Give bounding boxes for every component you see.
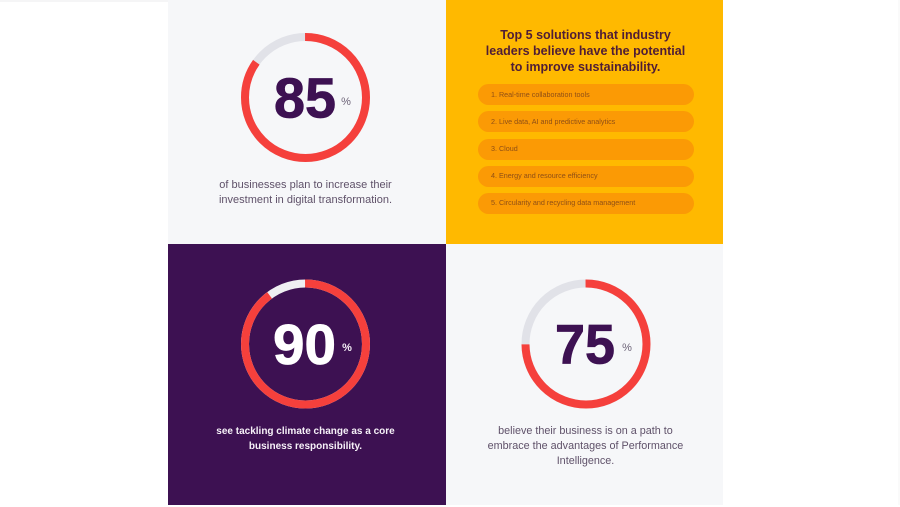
list item 5 [478,192,694,214]
donut chart: 90 percent [241,280,370,408]
caption: 75 percent: believe their business is on a path to [498,425,673,437]
donut chart: 75 percent: % [622,342,632,354]
donut chart: 85 percent [241,33,370,162]
donut chart: 75 percent [522,280,650,408]
heading: top 5 solutions: leaders believe have the potential [486,44,685,58]
heading: top 5 solutions [486,28,685,74]
list item 3: 3. Cloud [491,144,518,153]
list item 5: 5. Circularity and recycling data management [491,198,635,207]
caption: 75 percent [488,425,683,467]
list item 2 [478,111,694,132]
donut chart: 90 percent: % [342,342,352,354]
top edge shadow strip [0,0,168,2]
caption: 90 percent: see tackling climate change as a core [216,426,395,437]
panel: 90 percent climate responsibility [168,244,446,505]
list item 3 [478,138,694,160]
donut chart: 85 percent: 85 [274,66,336,130]
list item 2: 2. Live data, AI and predictive analytics [491,116,615,126]
caption: 75 percent: embrace the advantages of Performance [488,440,683,452]
heading: top 5 solutions: to improve sustainability. [511,60,660,74]
list item 1 [478,84,694,105]
caption: 85 percent: investment in digital transformation. [219,194,392,206]
list item 4: 4. Energy and resource efficiency [491,171,598,180]
donut chart: 85 percent: % [341,96,351,108]
heading: top 5 solutions: Top 5 solutions that industry [500,28,671,42]
panel: 75 percent performance intelligence [446,244,723,505]
panel: 85 percent digital transformation [168,0,446,244]
list item 4 [478,166,694,186]
donut chart: 90 percent: 90 [273,313,336,377]
caption: 85 percent [219,179,392,206]
right edge scrollbar strip [898,0,900,505]
caption: 75 percent: Intelligence. [557,455,614,467]
caption: 85 percent: of businesses plan to increase their [219,179,392,191]
list item 1: 1. Real-time collaboration tools [491,90,590,98]
panel: top 5 solutions [446,0,723,244]
caption: 90 percent: business responsibility. [249,441,362,452]
caption: 90 percent [216,426,395,452]
donut chart: 75 percent: 75 [555,312,615,376]
